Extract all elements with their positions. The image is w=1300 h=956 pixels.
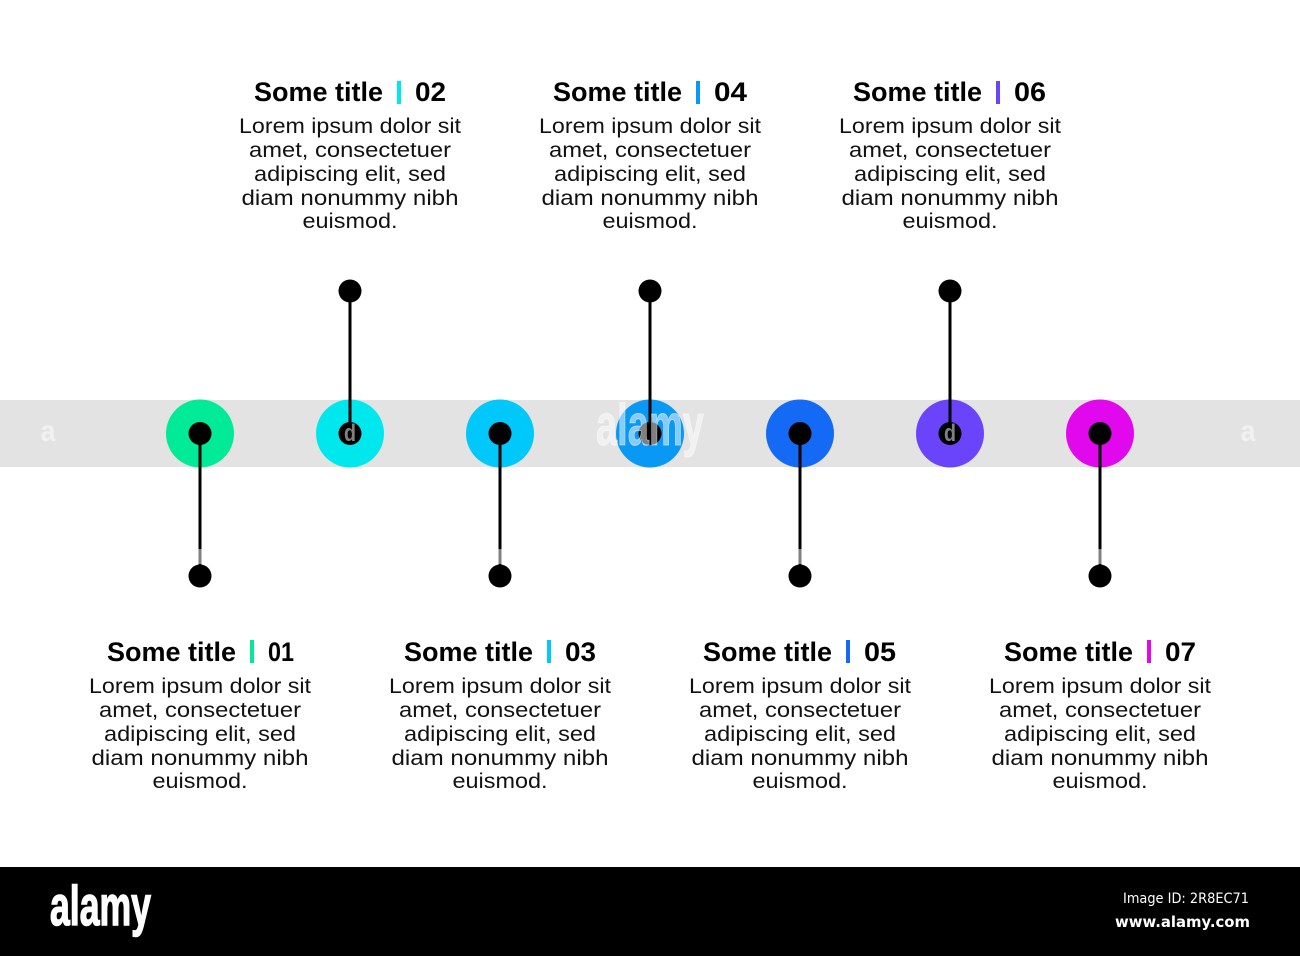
- text block 01: euismod.: [152, 769, 248, 793]
- watermark: small marks: d: [344, 420, 356, 447]
- text block 03: 03: [565, 637, 596, 667]
- text block 07: [989, 637, 1211, 793]
- watermark: small marks: a: [40, 415, 56, 448]
- image id: Image ID: 2R8EC71: [1123, 891, 1249, 907]
- circle 3: [466, 400, 534, 588]
- text block 07: adipiscing elit, sed: [1004, 722, 1196, 746]
- text block 02: 02: [415, 77, 446, 107]
- text block 03: Lorem ipsum dolor sit: [389, 674, 611, 698]
- text block 06: adipiscing elit, sed: [854, 162, 1046, 186]
- text block 01: [89, 637, 311, 793]
- footer logo: alamy: [50, 874, 151, 937]
- footer bar: [0, 867, 1300, 956]
- text block 02: [239, 77, 461, 233]
- circle 2: [316, 280, 384, 468]
- watermark: small marks: d: [944, 420, 956, 447]
- site url: www.alamy.com: [1115, 913, 1250, 931]
- text block 01: diam nonummy nibh: [92, 746, 308, 770]
- text block 01: Some title: [107, 637, 236, 667]
- text block 07: 07: [1165, 637, 1196, 667]
- text block 06: [839, 77, 1061, 233]
- text block 07: Lorem ipsum dolor sit: [989, 674, 1211, 698]
- text block 04: adipiscing elit, sed: [554, 162, 746, 186]
- text block 06: amet, consectetuer: [849, 138, 1051, 162]
- text block 06: euismod.: [902, 209, 998, 233]
- circle 6: [916, 280, 984, 468]
- text block 05: adipiscing elit, sed: [704, 722, 896, 746]
- text block 05: Some title: [703, 637, 832, 667]
- circle 4: [616, 280, 684, 468]
- text block 05: 05: [864, 637, 896, 667]
- text block 04: Lorem ipsum dolor sit: [539, 114, 761, 138]
- text block 03: diam nonummy nibh: [392, 746, 608, 770]
- text block 02: euismod.: [302, 209, 398, 233]
- circle 7: [1066, 400, 1134, 588]
- text block 02: amet, consectetuer: [249, 138, 451, 162]
- text block 05: euismod.: [752, 769, 848, 793]
- text block 06: Some title: [853, 77, 982, 107]
- text block 06: Lorem ipsum dolor sit: [839, 114, 1061, 138]
- text block 01: Lorem ipsum dolor sit: [89, 674, 311, 698]
- watermark: small marks: [40, 415, 1256, 564]
- text block 03: [389, 637, 611, 793]
- background band: [0, 400, 1300, 467]
- text block 05: Lorem ipsum dolor sit: [689, 674, 911, 698]
- text block 07: diam nonummy nibh: [992, 746, 1208, 770]
- text block 04: 04: [714, 77, 747, 107]
- text block 05: [689, 637, 911, 793]
- text block 07: euismod.: [1052, 769, 1148, 793]
- text block 02: Lorem ipsum dolor sit: [239, 114, 461, 138]
- text block 04: Some title: [553, 77, 682, 107]
- text block 01: adipiscing elit, sed: [104, 722, 296, 746]
- text block 02: diam nonummy nibh: [242, 186, 458, 210]
- text block 05: diam nonummy nibh: [692, 746, 908, 770]
- watermark: small marks: a: [1240, 415, 1256, 448]
- text block 02: adipiscing elit, sed: [254, 162, 446, 186]
- text block 03: adipiscing elit, sed: [404, 722, 596, 746]
- text block 01: 01: [268, 637, 294, 667]
- text block 04: [539, 77, 761, 233]
- text block 04: amet, consectetuer: [549, 138, 751, 162]
- text block 04: diam nonummy nibh: [542, 186, 758, 210]
- text block 03: Some title: [404, 637, 533, 667]
- text block 03: euismod.: [452, 769, 548, 793]
- text block 05: amet, consectetuer: [699, 698, 901, 722]
- text block 02: Some title: [254, 77, 383, 107]
- circle 1: [166, 400, 234, 588]
- text block 03: amet, consectetuer: [399, 698, 601, 722]
- text block 06: diam nonummy nibh: [842, 186, 1058, 210]
- watermark: center: alamy: [596, 393, 704, 458]
- text block 07: amet, consectetuer: [999, 698, 1201, 722]
- text block 04: euismod.: [602, 209, 698, 233]
- text block 07: Some title: [1004, 637, 1133, 667]
- text block 06: 06: [1014, 77, 1046, 107]
- circle 5: [766, 400, 834, 588]
- text block 01: amet, consectetuer: [99, 698, 301, 722]
